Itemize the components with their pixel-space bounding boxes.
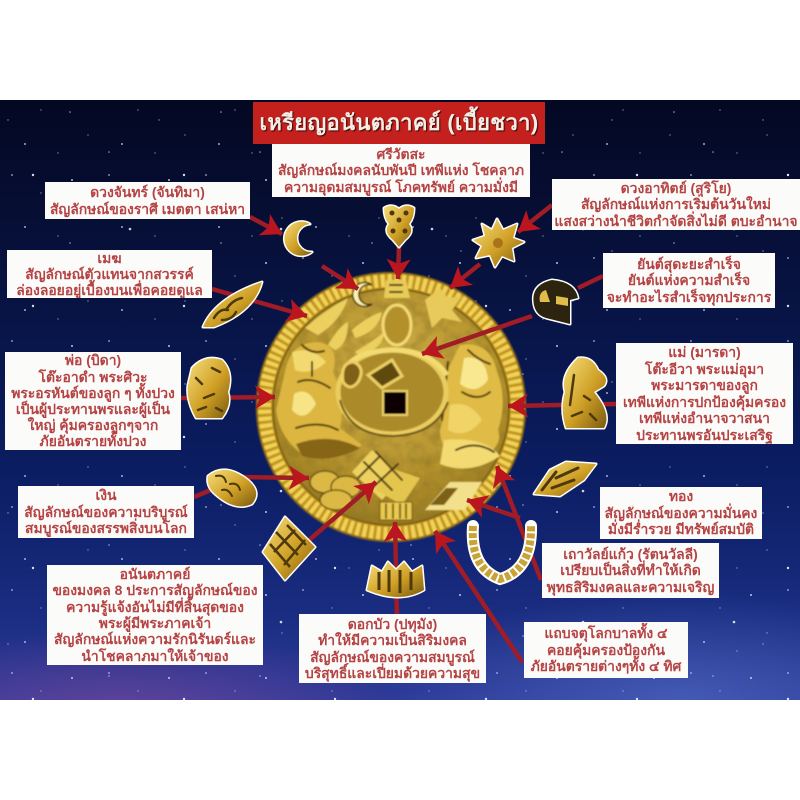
label: endless knot: พระผู้มีพระภาคเจ้า: [99, 615, 211, 631]
label: mother: ประทานพรอันประเสริฐ: [636, 426, 773, 442]
infographic artwork: starry background, coin, icons and arrows: [0, 100, 800, 700]
icon: srivatsa: [384, 206, 414, 247]
label: sun: [552, 179, 800, 230]
label: endless knot: นำโชคลาภมาให้เจ้าของ: [81, 648, 229, 664]
coin: central yant ring with square hole: [338, 350, 448, 436]
label: mother: แม่ (มารดา): [668, 344, 741, 360]
icon: lotus: [367, 562, 424, 597]
icon: mother figure: [563, 358, 606, 428]
arrow: moon label to icon: [250, 217, 282, 234]
label: srivatsa: สัญลักษณ์มงคลนับพันปี เทพีแห่ง โชคลาภ: [278, 162, 524, 178]
icon: father figure: [188, 358, 230, 418]
gold coin: [256, 272, 526, 542]
arrow: srivatsa to coin: [398, 246, 399, 279]
icon: cloud: [203, 282, 262, 327]
coin: srivatsa emblem: [383, 280, 411, 345]
label: four guardians band: แถบจตุโลกบาลทั้ง ๔: [544, 625, 668, 641]
label: crystal vine: เถาวัลย์แก้ว (รัตนวัลลี): [563, 546, 698, 562]
icon: endless knot: [263, 517, 315, 580]
label: silver: [18, 486, 194, 538]
label: success yant: [603, 253, 775, 308]
label: gold: [600, 487, 762, 539]
label: cloud: [7, 250, 212, 298]
arrow: mother to coin: [508, 404, 616, 406]
label: mother: เทพีแห่งอำนาจวาสนา: [639, 410, 770, 426]
label: sun: แสงสว่างนำชีวิตกำจัดสิ่งไม่ดี ตบะอำนาจ: [554, 213, 798, 229]
label: crystal vine: [542, 543, 719, 598]
label: cloud: ล่องลอยอยู่เบื้องบนเพื่อคอยดูแล: [16, 282, 203, 298]
label: father: โต๊ะอาดำ พระศิวะ: [39, 369, 147, 385]
label: gold: มั่งมีร่ำรวย มีทรัพย์สมบัติ: [608, 521, 754, 537]
label: father: [5, 352, 181, 450]
label: endless knot: สัญลักษณ์แห่งความรักนิรันดร์และ: [54, 631, 256, 647]
label: silver: เงิน: [95, 487, 117, 503]
title: [253, 102, 545, 144]
label: mother: เทพีแห่งการปกป้องคุ้มครอง: [623, 394, 786, 410]
label: crystal vine: พุทธสิริมงคลและความเจริญ: [547, 579, 714, 595]
arrow: moon icon to coin: [322, 266, 358, 289]
label: gold: ทอง: [669, 488, 693, 504]
icon: sun: [473, 219, 524, 267]
coin: sun: [425, 288, 462, 328]
arrow: cloud to coin: [212, 289, 307, 316]
label: srivatsa: [272, 144, 530, 197]
arrow: lotus to coin: [395, 522, 397, 614]
label: silver: สัญลักษณ์ของความบริบูรณ์: [24, 504, 188, 520]
label: sun: สัญลักษณ์แห่งการเริ่มต้นวันใหม่: [581, 196, 771, 212]
arrow: sun icon to coin: [450, 264, 480, 288]
arrow: four guardians band to coin: [435, 531, 522, 662]
label: lotus: [299, 614, 486, 683]
label: endless knot: ของมงคล 8 ประการสัญลักษณ์ของ: [52, 582, 258, 598]
arrow: gold to coin: [467, 500, 520, 518]
label: crystal vine: เปรียบเป็นสิ่งที่ทำให้เกิด: [560, 562, 701, 578]
arrows pointing to each coin feature: [181, 205, 616, 662]
label: moon: ดวงจันทร์ (จันทิมา): [90, 184, 205, 200]
label: success yant: ยันต์สุดะยะสำเร็จ: [637, 256, 741, 272]
icon: garland: [473, 526, 531, 579]
label: moon: สัญลักษณ์ของราศี เมตตา เสน่หา: [50, 200, 245, 216]
label: cloud: เมฆ: [97, 250, 122, 266]
icon: crescent moon: [284, 222, 312, 256]
coin: mottled relief texture: [273, 289, 509, 525]
coin: moon: [353, 282, 372, 306]
label: lotus: บริสุทธิ์และเปี่ยมด้วยความสุข: [305, 665, 480, 681]
starry sky background: [0, 100, 800, 700]
label: father: พระอรหันต์ของลูก ๆ ทั้งปวง: [11, 385, 175, 401]
coin: mother figure: [440, 344, 503, 468]
label: endless knot: อนันตภาคย์: [120, 566, 190, 582]
arrow: yant icon to coin: [422, 316, 532, 354]
coin: silver cloud pile: [310, 471, 361, 510]
icon: gold bars: [534, 462, 596, 496]
label: four guardians band: ภัยอันตรายต่างๆทั้ง ๔ ทิศ: [531, 658, 681, 674]
label: endless knot: ความรู้แจ้งอันไม่มีที่สิ้นสุดของ: [66, 599, 244, 615]
label: success yant: จะทำอะไรสำเร็จทุกประการ: [607, 289, 771, 305]
label: mother: [616, 343, 793, 444]
coin: father figure: [276, 342, 362, 459]
label: mother: พระมารดาของลูก: [651, 377, 758, 393]
label: endless knot: [47, 565, 263, 665]
label: sun: ดวงอาทิตย์ (สุริโย): [621, 180, 731, 196]
arrow: silver to coin: [194, 477, 309, 497]
label: lotus: สัญลักษณ์ของความสมบูรณ์: [310, 648, 475, 664]
label: cloud: สัญลักษณ์ตัวแทนจากสวรรค์: [25, 266, 194, 282]
icon: yant: [533, 280, 578, 324]
coin: gold bars and lotus: [380, 482, 482, 520]
label: lotus: ดอกบัว (ปทุมัง): [348, 616, 437, 632]
arrow: knot to coin: [300, 482, 376, 548]
coin: endless knot: [352, 450, 420, 505]
label: srivatsa: ความอุดมสมบูรณ์ โภคทรัพย์ ความมั่งมี: [284, 179, 518, 195]
label: father: เป็นผู้ประทานพรและผู้เป็น: [16, 401, 170, 417]
coin: clouds at upper left: [305, 298, 384, 356]
icon: silver ingots: [208, 470, 256, 506]
label: mother: โต๊ะอีวา พระแม่อุมา: [645, 360, 764, 376]
arrow: sun label to icon: [518, 205, 552, 232]
label: father: ภัยอันตรายทั้งปวง: [40, 433, 146, 449]
arrow: garland to coin: [497, 466, 541, 580]
label: srivatsa: ศรีวัตสะ: [376, 146, 426, 162]
label: four guardians band: คอยคุ้มครองป้องกัน: [547, 642, 665, 658]
label: four guardians band: [524, 622, 688, 678]
label: father: ใหญ่ คุ้มครองลูกๆจาก: [28, 417, 158, 433]
label: lotus: ทำให้มีความเป็นสิริมงคล: [318, 632, 467, 648]
label: success yant: ยันต์แห่งความสำเร็จ: [628, 272, 750, 288]
label: gold: สัญลักษณ์ของความมั่นคง: [605, 505, 757, 521]
label: father: พ่อ (บิดา): [65, 352, 121, 368]
arrow: yant label to icon: [578, 276, 603, 288]
label: silver: สมบูรณ์ของสรรพสิ่งบนโลก: [25, 520, 187, 536]
title: เหรียญอนันตภาคย์ (เบี้ยชวา): [260, 110, 538, 135]
arrow: father to coin: [181, 397, 275, 398]
label: moon: [45, 182, 250, 219]
